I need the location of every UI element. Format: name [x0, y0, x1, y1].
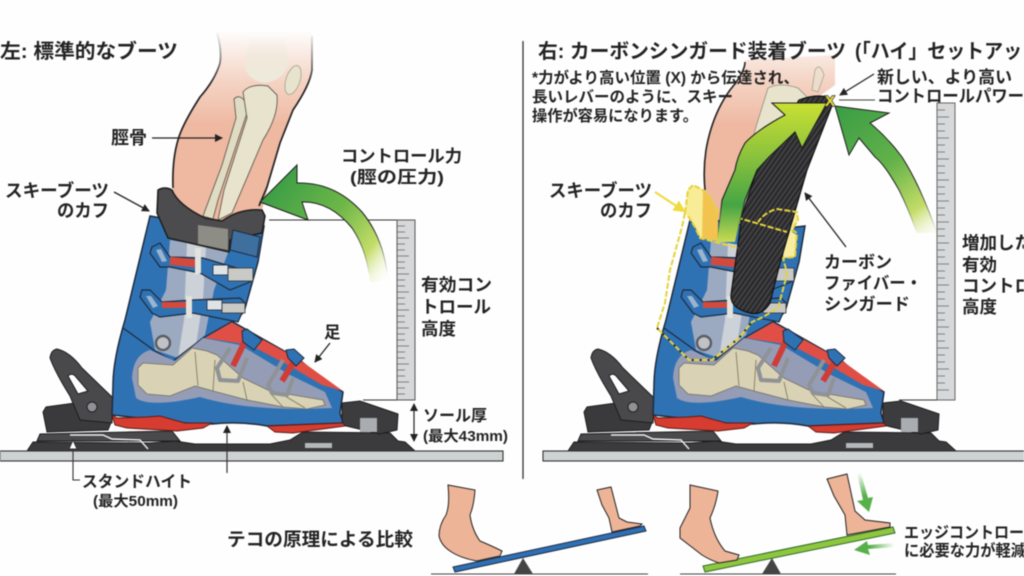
- right leg with skin: [704, 55, 835, 240]
- arrow: new pivot: [840, 74, 874, 95]
- label: cuff: スキーブーツ: [5, 180, 109, 201]
- green force arrow down: [857, 473, 873, 512]
- tall ruler: [937, 103, 955, 400]
- foot: right seesaw right: [827, 474, 890, 535]
- arrow: yellow cuff: [655, 192, 684, 211]
- label: foot: 足: [324, 324, 341, 342]
- cuff dashed outline: [657, 185, 798, 360]
- explanation text: [532, 68, 799, 125]
- dark edge beside cuff dashes: [657, 322, 752, 360]
- arrow: control force: [260, 165, 388, 282]
- ski boot shell right: [653, 216, 886, 433]
- binding: [27, 349, 415, 451]
- right heading: 右: カーボンシンガード装着ブーツ: [538, 39, 846, 63]
- ski right: [543, 451, 1024, 461]
- label: control force: [341, 147, 462, 187]
- label: reduced effort: [904, 525, 1024, 560]
- seesaw blue: [453, 526, 646, 572]
- panel: lever principle comparison: [227, 473, 1024, 574]
- fulcrum left: [514, 558, 533, 574]
- explanation text: 操作が容易になります。: [532, 106, 698, 125]
- binding right: [568, 349, 956, 451]
- label: tibia: 脛骨: [111, 128, 147, 148]
- panel: left standard boot: [0, 30, 508, 510]
- divider between panels: [522, 41, 524, 479]
- ski boot shell: [112, 216, 345, 433]
- ski: [0, 451, 503, 461]
- label: control force: コントロール力: [341, 147, 462, 166]
- right heading: [538, 39, 1024, 63]
- ground lines: [431, 573, 896, 575]
- right bones: [735, 67, 824, 248]
- lime arrow: [717, 103, 827, 242]
- arrow: foot: [315, 343, 330, 362]
- label: carbon fiber shin guard: [824, 253, 922, 314]
- leg outlines: [173, 33, 312, 206]
- label: control force: (脛の圧力): [350, 168, 444, 187]
- label: sole thickness: (最大43mm): [423, 427, 508, 445]
- arrow: stand height center: [226, 426, 228, 473]
- label: increased effective control height: 有効: [962, 255, 997, 275]
- arrow: carbon guard: [805, 193, 846, 247]
- leader: stand height bracket: [69, 440, 80, 480]
- yellow translucent cuff: [685, 185, 798, 258]
- label: stand height: (最大50mm): [93, 492, 178, 510]
- leader line: new pivot: [839, 99, 875, 101]
- label: effective control height: 有効コン: [421, 275, 492, 295]
- label: sole thickness: [423, 407, 508, 445]
- green force arrow left: [854, 541, 894, 555]
- label: cuff: [5, 180, 109, 221]
- ruler base line: [899, 399, 937, 401]
- label: stand height: スタンドハイト: [82, 473, 192, 491]
- explanation text: 長いレバーのように、スキー: [532, 88, 733, 106]
- carbon fiber shin guard: [731, 96, 833, 314]
- marker X: X: [825, 93, 835, 110]
- seesaw green: [703, 527, 895, 572]
- explanation text: *力がより高い位置 (X) から伝達され、: [532, 68, 799, 87]
- bones: femur, patella, tibia, fibula: [203, 35, 304, 220]
- foot: right seesaw left: [680, 485, 739, 563]
- left heading: 左: 標準的なブーツ: [0, 39, 178, 63]
- height reference line: [269, 220, 397, 400]
- panel: right carbon shin guard boot: [532, 39, 1024, 461]
- label: increased effective control height: 高度: [962, 297, 997, 317]
- label: cuff right: スキーブーツ: [549, 180, 652, 201]
- label: effective control height: 高度: [421, 319, 456, 339]
- fulcrum right: [762, 558, 781, 574]
- label: effective control height: [421, 275, 492, 339]
- arrow: tibia: [152, 137, 222, 139]
- label: new higher control power: [877, 67, 1024, 106]
- lever heading: テコの原理による比較: [227, 529, 413, 550]
- green arrow: [835, 106, 937, 233]
- leg with skin: [173, 30, 312, 225]
- right leg outline: [704, 62, 745, 190]
- foot: left seesaw right: [597, 487, 642, 532]
- arrow: sole thickness: [410, 403, 418, 441]
- boot liner cuff: [157, 188, 265, 257]
- label: cuff: のカフ: [57, 201, 109, 221]
- label: carbon fiber shin guard: ファイバー・: [824, 274, 922, 293]
- label: new higher control power: 新しい、より高い: [877, 67, 1012, 87]
- label: cuff right: のカフ: [600, 201, 652, 221]
- arrow: cuff: [114, 192, 149, 211]
- foot: left seesaw left: [439, 485, 502, 561]
- label: increased effective control height: [962, 233, 1024, 317]
- label: stand height: [82, 473, 192, 510]
- label: carbon fiber shin guard: カーボン: [824, 253, 892, 272]
- ruler: [397, 220, 415, 400]
- label: sole thickness: ソール厚: [423, 407, 487, 425]
- label: cuff right: [549, 180, 652, 221]
- label: effective control height: トロール: [421, 297, 491, 317]
- label: carbon fiber shin guard: シンガード: [824, 295, 910, 314]
